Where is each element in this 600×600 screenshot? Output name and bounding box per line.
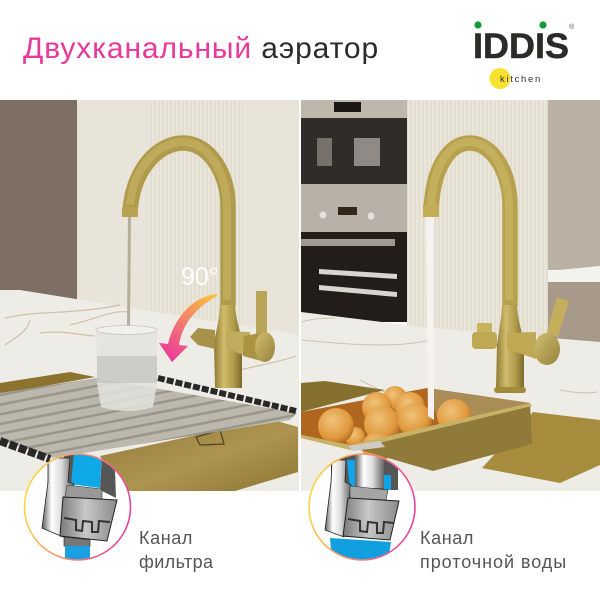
chrome centre pipe xyxy=(355,452,384,488)
rack: steel rods xyxy=(0,378,297,458)
basket: inner xyxy=(301,388,530,445)
wall: right alcove xyxy=(548,100,600,270)
cartridge body xyxy=(343,498,399,540)
sink drain detail xyxy=(196,430,224,445)
blue channel, bottom xyxy=(330,538,391,562)
faucet: spout xyxy=(431,143,510,306)
faucet: base ring xyxy=(494,387,526,393)
faucet: lever xyxy=(256,291,267,335)
blue channels, top xyxy=(347,460,391,490)
blue channel, top xyxy=(70,450,102,488)
title: Двухканальный аэратор xyxy=(23,32,379,65)
arrow: 90 degree turn xyxy=(159,294,217,362)
chrome sleeve xyxy=(325,460,351,537)
rack: black rubber ends, front xyxy=(0,441,50,459)
faucet: left filter handle xyxy=(472,323,497,349)
faucet: lever xyxy=(547,297,569,337)
inset: tap water channel aerator xyxy=(308,452,416,562)
sink edge, back left xyxy=(301,381,385,412)
logo: IDDIS kitchen xyxy=(473,21,575,89)
oven: top control strip xyxy=(301,100,407,119)
basket: front face xyxy=(350,403,532,471)
faucet: main cross body xyxy=(507,332,536,359)
cartridge body xyxy=(60,497,117,541)
basket: inner back-right wall xyxy=(427,388,530,417)
blue channel, bottom xyxy=(65,546,90,562)
photo: right kitchen scene, tap water xyxy=(301,100,600,491)
lower neck xyxy=(64,537,90,547)
neck xyxy=(65,485,102,501)
basket: corner clip xyxy=(348,441,385,451)
neck xyxy=(350,486,388,500)
glass xyxy=(96,326,157,411)
faucet: body xyxy=(214,305,242,388)
wall: cream fluted panel xyxy=(407,100,548,340)
faucet: spout xyxy=(130,143,228,306)
oranges xyxy=(318,386,471,462)
caption: tap water channel: проточной воды xyxy=(420,552,567,572)
logo: IDDIS kitchen: kitchen xyxy=(500,74,542,85)
inset: filter channel aerator xyxy=(24,450,131,562)
basket: front lip xyxy=(301,403,532,450)
sink edge, back left xyxy=(0,372,95,394)
logo: IDDIS kitchen: ® xyxy=(569,23,575,31)
dark housing xyxy=(331,452,398,490)
faucet: body xyxy=(496,305,524,388)
water stream xyxy=(426,217,434,420)
marble countertop xyxy=(0,290,300,491)
cabinet xyxy=(548,282,600,342)
marble veins xyxy=(302,318,598,393)
faucet: lever cap xyxy=(243,332,275,362)
faucet: spout highlight xyxy=(431,142,509,300)
caption: filter channel: фильтра xyxy=(139,552,214,572)
cartridge teeth xyxy=(64,518,110,532)
sink basin, front right xyxy=(482,412,600,483)
label: 90 degrees: 90° xyxy=(181,263,219,291)
wall: cream fluted panels xyxy=(77,100,300,340)
shelf xyxy=(548,266,600,282)
dark housing xyxy=(62,452,116,498)
marble veins xyxy=(5,305,296,370)
photo: left kitchen scene, filter water xyxy=(0,100,300,491)
logo: IDDIS kitchen: IDDIS xyxy=(473,27,569,66)
caption: filter channel: Канал xyxy=(139,528,193,548)
cartridge teeth xyxy=(348,519,394,533)
faucet: spout highlight xyxy=(130,142,227,300)
faucet: aerator tip xyxy=(122,207,138,217)
faucet: left filter handle xyxy=(190,328,215,349)
oven: middle control panel xyxy=(301,184,407,233)
wall: brown panel xyxy=(0,100,78,300)
water stream xyxy=(127,217,131,326)
caption: tap water channel: Канал xyxy=(420,528,474,548)
faucet: main cross body xyxy=(230,332,250,358)
marble countertop xyxy=(301,312,600,491)
sink basin, front right xyxy=(100,419,298,491)
faucet: lever cap xyxy=(534,333,560,365)
faucet: aerator tip xyxy=(423,205,439,217)
chrome sleeve xyxy=(42,458,74,537)
rack: black rubber ends, back xyxy=(158,378,296,411)
oven: lower door xyxy=(301,232,407,322)
oven: upper glass xyxy=(301,118,407,185)
